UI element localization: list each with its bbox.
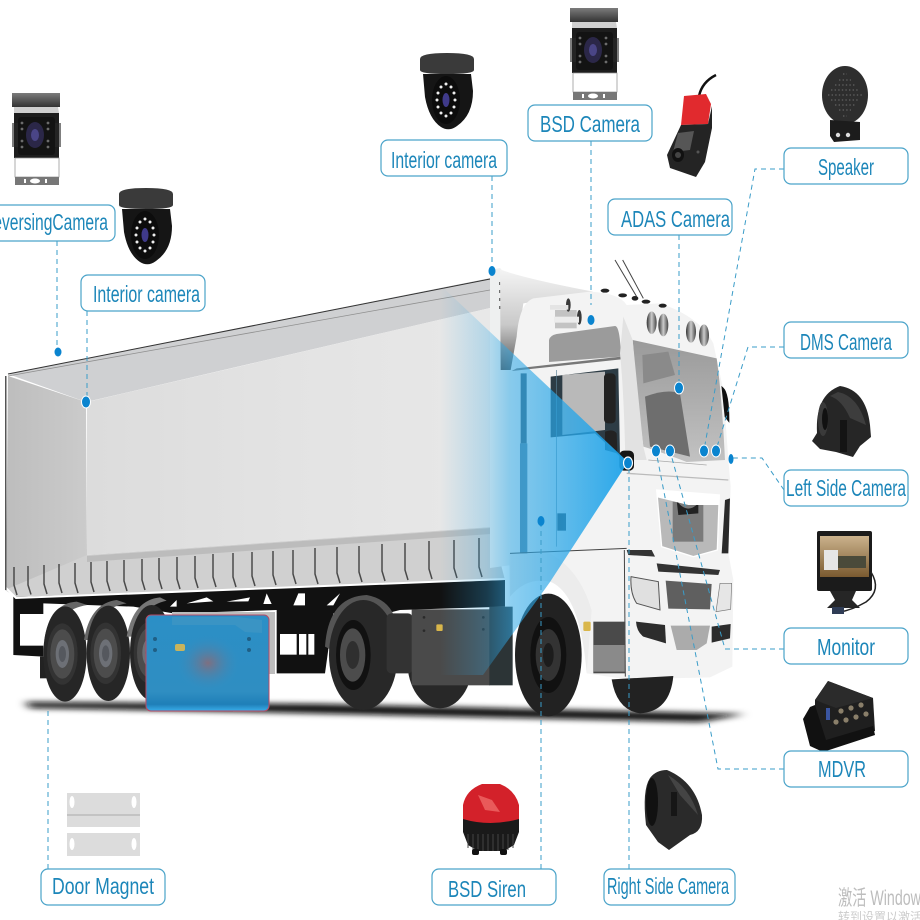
- roof horns: [550, 298, 582, 328]
- curtain lower strip: [5, 527, 505, 597]
- trailer chassis and wheels: [13, 578, 513, 710]
- icon: reversing camera: [12, 93, 61, 185]
- label: BSD Camera: BSD Camera: [540, 111, 640, 137]
- label: Monitor: Monitor: [817, 634, 875, 660]
- drive wheels and fuel tank: [325, 595, 513, 710]
- blue field-of-view cone: [440, 285, 628, 675]
- label: BSD Camera: [528, 105, 652, 141]
- label: ADAS Camera: [608, 199, 732, 235]
- icon: right side camera: [645, 770, 702, 850]
- side wall: [87, 308, 491, 555]
- windshield: [633, 340, 725, 462]
- side mirror housing: [619, 451, 634, 471]
- icon: speaker: [822, 66, 868, 142]
- ground shadow: [25, 702, 745, 722]
- front wheel: [515, 594, 582, 716]
- roof knobs and antennas: [601, 260, 667, 308]
- door slats: [521, 373, 527, 443]
- black band: [657, 563, 720, 575]
- headlights: [631, 577, 660, 610]
- blue siren/battery box highlight: [146, 612, 275, 711]
- label: Right Side Camera: Right Side Camera: [607, 873, 729, 899]
- icon: left side camera: [812, 386, 871, 457]
- rear end wall: [6, 376, 87, 590]
- label: Interior camera left: Interior camera: [93, 281, 200, 307]
- label: ReversingCamera: [0, 205, 115, 241]
- roof interior: [8, 278, 490, 402]
- bogie wheels: [43, 597, 173, 702]
- lower grille: [666, 581, 712, 609]
- icon: MDVR recorder: [803, 681, 875, 752]
- roof air fairing: [500, 269, 593, 370]
- label: BSD Siren: [432, 869, 556, 905]
- icon: BSD camera: [570, 8, 619, 100]
- label: MDVR: [784, 751, 908, 787]
- trailer body: [5, 268, 512, 598]
- truck illustration: [5, 260, 745, 722]
- front bulkhead column: [490, 268, 512, 568]
- icon: interior camera left: [119, 188, 173, 264]
- label: ADAS Camera: ADAS Camera: [621, 206, 730, 232]
- label: Interior camera top: Interior camera: [391, 147, 497, 173]
- label: Door Magnet: [41, 869, 165, 905]
- label: Interior camera left: [81, 275, 205, 311]
- label: MDVR: MDVR: [818, 756, 866, 782]
- door window: [551, 368, 620, 457]
- label: Left Side Camera: [784, 470, 908, 506]
- watermark: system activation: [838, 887, 920, 920]
- sleeper window: [549, 326, 621, 362]
- step well: [593, 622, 625, 673]
- icon: BSD siren: [463, 784, 519, 855]
- icon: interior camera top: [420, 53, 474, 129]
- label: Interior camera top: [381, 140, 507, 176]
- upper grille: [657, 490, 719, 557]
- dashed leader lines: [48, 141, 784, 869]
- label: DMS Camera: [784, 322, 908, 358]
- icon: door magnet: [67, 793, 140, 856]
- roof spot lights: [647, 311, 709, 346]
- fog lamps: [636, 622, 666, 643]
- label: BSD Siren: BSD Siren: [448, 876, 526, 902]
- label: Right Side Camera: [604, 869, 735, 905]
- icon: monitor: [817, 531, 875, 614]
- label: Speaker: [784, 148, 908, 184]
- label: Door Magnet: Door Magnet: [52, 873, 154, 899]
- sensor location dots: [54, 266, 734, 526]
- icon: ADAS camera: [667, 75, 716, 177]
- label: Monitor: [784, 628, 908, 664]
- tractor cab: [500, 260, 733, 716]
- curtain hooks: [14, 538, 482, 595]
- label: Speaker: Speaker: [818, 154, 874, 180]
